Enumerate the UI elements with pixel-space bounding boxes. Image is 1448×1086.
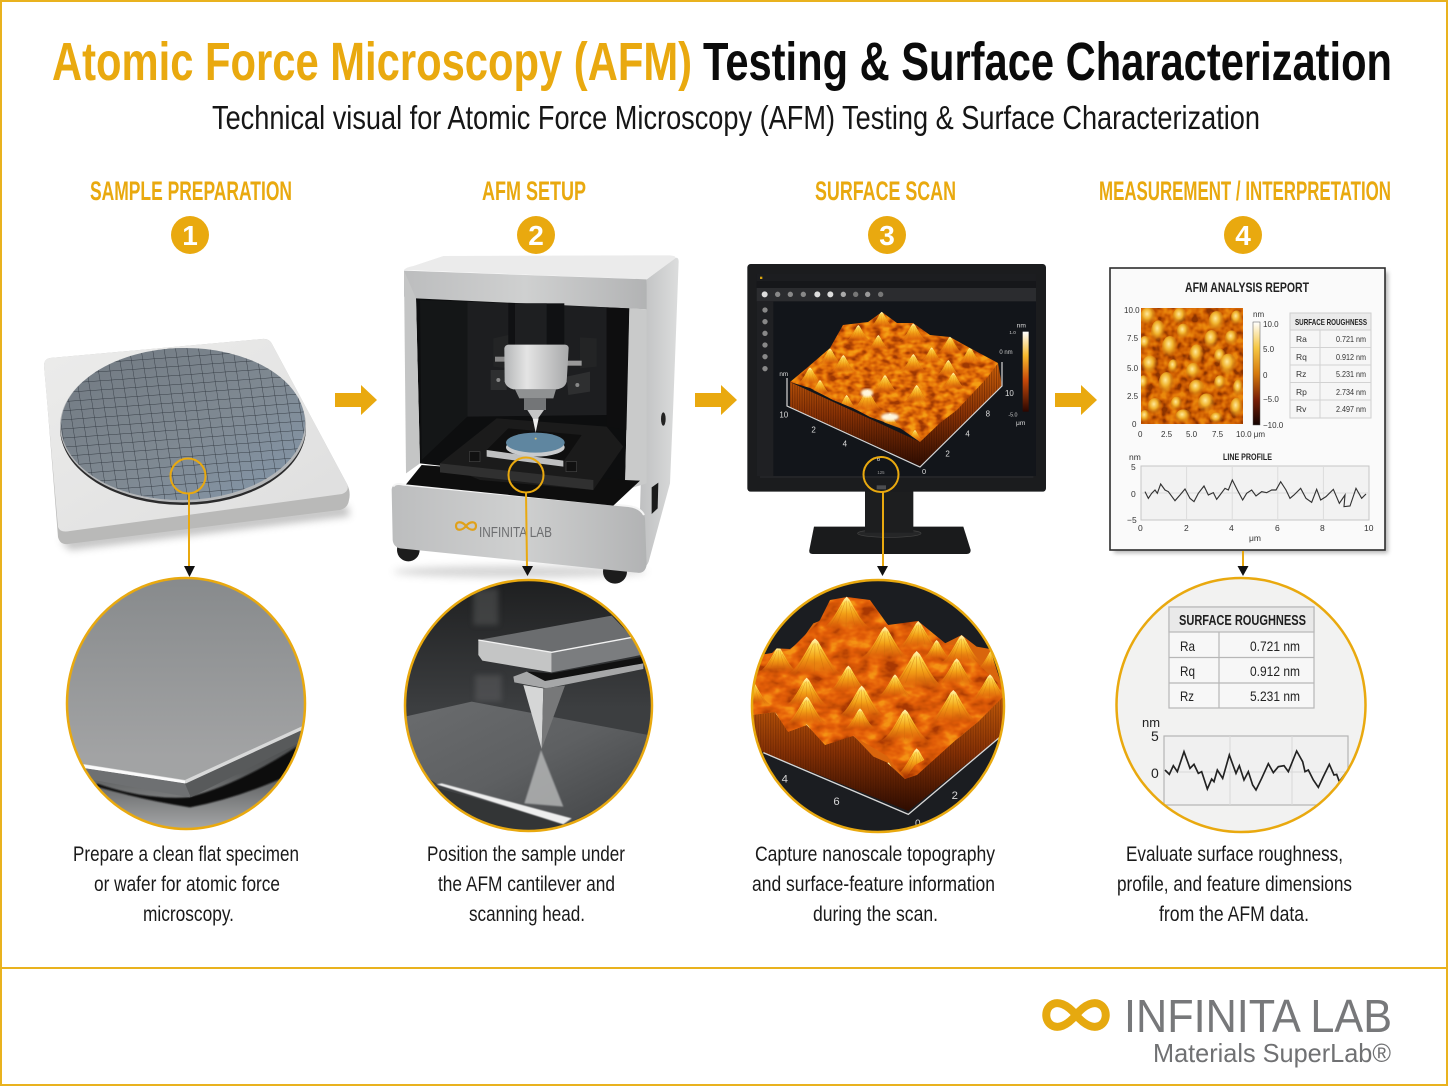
line profile chart: 6: [1275, 523, 1280, 533]
caption step 2: Position the sample under: [427, 842, 625, 866]
roughness mini table: Rq: [1180, 663, 1195, 679]
AFM height map: 2.5: [1161, 430, 1173, 439]
3D axes: [787, 362, 1002, 467]
AFM height map: 7.5: [1127, 334, 1139, 343]
callout: monitor magnifier: [864, 457, 898, 576]
monitor with AFM software: 0: [922, 467, 926, 476]
AFM height map: 0: [1138, 430, 1143, 439]
instrument logo: [456, 522, 552, 541]
3D surface walls: [790, 363, 1002, 466]
instrument logo: INFINITA LAB: [479, 524, 552, 541]
callout: instrument magnifier: [508, 458, 544, 576]
AFM height map: 0: [1132, 420, 1137, 429]
AFM instrument illustration: [392, 255, 679, 584]
detail circle: cantilever and tip: [404, 578, 654, 832]
number badge 4: [1224, 216, 1262, 254]
roughness table: Rz: [1296, 369, 1306, 379]
footer logo: Materials SuperLab®: [1153, 1038, 1391, 1068]
cantilever beam: [478, 616, 632, 652]
caption step 1: [73, 842, 299, 926]
heading: step 2 AFM setup: AFM SETUP: [482, 176, 586, 206]
caption step 1: or wafer for atomic force: [94, 872, 280, 896]
line profile chart: −5: [1127, 515, 1137, 525]
roughness table: Rp: [1296, 387, 1307, 397]
arrow: step 1 to 2: [335, 385, 377, 415]
roughness table: SURFACE ROUGHNESS: [1295, 317, 1367, 327]
detail circle: 3D surface topography: [750, 578, 1006, 834]
tip reflection: [524, 750, 563, 807]
machine front top band: [404, 271, 647, 309]
line profile chart: [1127, 452, 1374, 543]
footer divider: [0, 967, 1448, 969]
monitor with AFM software: 6: [877, 456, 881, 463]
roughness table: 5.231 nm: [1336, 369, 1366, 379]
detail circle: 3D surface topography: 0: [915, 819, 921, 830]
line profile chart: 8: [1320, 523, 1325, 533]
number badge 1: 1: [182, 220, 198, 251]
line profile chart: 5: [1131, 462, 1136, 472]
wafer on plate illustration: [44, 339, 350, 550]
callout: report connector: [1238, 551, 1248, 576]
caption step 1: Prepare a clean flat specimen: [73, 842, 299, 866]
number badge 4: 4: [1235, 220, 1251, 251]
footer logo: [1046, 990, 1392, 1068]
colour scale: 0: [1263, 371, 1268, 380]
roughness table: 2.497 nm: [1336, 404, 1366, 414]
deck: [406, 465, 640, 506]
roughness mini table: Ra: [1180, 638, 1195, 654]
caption step 4: Evaluate surface roughness,: [1126, 842, 1343, 866]
roughness mini table: 5.231 nm: [1250, 688, 1300, 704]
pillars: [404, 271, 420, 473]
AFM height map: 10.0 μm: [1236, 430, 1265, 439]
detail circle: 3D surface topography: 6: [833, 796, 840, 808]
monitor with AFM software: 10: [779, 410, 789, 419]
AFM height map: 5.0: [1127, 364, 1139, 373]
caption step 4: [1117, 842, 1352, 926]
title: [52, 32, 1392, 92]
3D surface peaks: [794, 312, 984, 442]
roughness table: 0.721 nm: [1336, 334, 1366, 344]
colour scale: 10.0: [1263, 320, 1279, 329]
monitor with AFM software: 8: [986, 410, 991, 419]
AFM height map: 7.5: [1212, 430, 1224, 439]
number badge 2: 2: [528, 220, 544, 251]
monitor with AFM software: -5.0: [1008, 413, 1018, 419]
title: Atomic Force Microscopy (AFM): [52, 32, 692, 92]
machine top: [404, 255, 676, 279]
colour scale: −10.0: [1263, 421, 1284, 430]
roughness table: 0.912 nm: [1336, 352, 1366, 362]
caption step 4: profile, and feature dimensions: [1117, 872, 1352, 896]
footer logo: INFINITA LAB: [1124, 990, 1392, 1042]
number badge 1: [171, 216, 209, 254]
monitor with AFM software: 4: [843, 440, 848, 449]
monitor with AFM software: 0 nm: [999, 350, 1013, 356]
roughness table: Ra: [1296, 334, 1307, 344]
monitor with AFM software: 4: [965, 430, 970, 439]
monitor with AFM software: nm: [1017, 323, 1026, 330]
mini profile plot: 5: [1151, 728, 1159, 744]
callout: sample magnifier: [170, 458, 206, 577]
chamber: [416, 298, 629, 487]
roughness mini table: Rz: [1180, 688, 1194, 704]
roughness mini table: 0.912 nm: [1250, 663, 1300, 679]
roughness table: Rv: [1296, 404, 1307, 414]
number badge 3: [868, 216, 906, 254]
line profile chart: 4: [1229, 523, 1234, 533]
stage surface: [405, 702, 648, 823]
AFM height map: 5.0: [1186, 430, 1198, 439]
roughness mini table: SURFACE ROUGHNESS: [1179, 613, 1306, 629]
monitor with AFM software: μm: [1016, 420, 1026, 427]
caption step 4: from the AFM data.: [1159, 902, 1309, 926]
number badge 2: [517, 216, 555, 254]
colour scale: 5.0: [1263, 345, 1275, 354]
monitor with AFM software: [747, 264, 1046, 554]
surface map: [753, 597, 1007, 779]
mini profile plot: 0: [1151, 765, 1159, 781]
caption step 2: the AFM cantilever and: [438, 872, 615, 896]
detail circle: specimen surface: [60, 570, 315, 837]
roughness mini table: [1169, 607, 1314, 708]
line profile chart: 0: [1131, 489, 1136, 499]
subtitle: Technical visual for Atomic Force Microscopy (AFM) Testing & Surface Characterization: [212, 99, 1260, 136]
base: [392, 484, 647, 573]
arrow: step 3 to 4: [1055, 385, 1097, 415]
machine right side: [640, 258, 679, 565]
detail circle: 3D surface topography: 4: [782, 773, 788, 785]
line profile chart: 10: [1364, 523, 1374, 533]
roughness table: 2.734 nm: [1336, 387, 1366, 397]
colour scale: [1253, 310, 1284, 430]
monitor with AFM software: nm: [779, 371, 788, 378]
caption step 3: during the scan.: [813, 902, 938, 926]
report sheet: AFM analysis report: [1110, 268, 1388, 553]
roughness table: [1290, 313, 1371, 418]
AFM height map: [1124, 306, 1265, 439]
icon: infinity mark: [1046, 1003, 1106, 1027]
roughness mini table: 0.721 nm: [1250, 638, 1300, 654]
detail circle: 3D surface topography: 2: [952, 790, 958, 802]
monitor with AFM software: 2: [811, 426, 816, 435]
caption step 3: Capture nanoscale topography: [755, 842, 995, 866]
detail circle: roughness values: [1110, 575, 1372, 840]
caption step 3: and surface-feature information: [752, 872, 995, 896]
caption step 1: microscopy.: [143, 902, 234, 926]
mini profile plot: [1142, 715, 1348, 805]
line profile chart: μm: [1249, 533, 1261, 543]
heading: step 1 sample preparation: SAMPLE PREPARATION: [90, 176, 292, 206]
line profile chart: LINE PROFILE: [1223, 452, 1272, 463]
AFM height map: 2.5: [1127, 392, 1139, 401]
number badge 3: 3: [879, 220, 895, 251]
caption step 2: scanning head.: [469, 902, 585, 926]
mini profile plot: nm: [1142, 715, 1160, 730]
AFM height map: 10.0: [1124, 306, 1140, 315]
line profile chart: nm: [1129, 452, 1141, 462]
report title: AFM ANALYSIS REPORT: [1185, 280, 1310, 295]
line profile chart: 2: [1184, 523, 1189, 533]
caption step 2: [427, 842, 625, 926]
monitor with AFM software: 1.0: [1009, 330, 1016, 335]
probe tip: [523, 685, 543, 749]
roughness table: Rq: [1296, 352, 1307, 362]
scan head: [493, 335, 508, 368]
monitor with AFM software: 125: [877, 470, 885, 475]
colour scale: nm: [1253, 310, 1264, 319]
heading: step 3 surface scan: SURFACE SCAN: [815, 176, 956, 206]
line profile chart: 0: [1138, 523, 1143, 533]
colour scale: −5.0: [1263, 395, 1279, 404]
caption step 3: [752, 842, 995, 926]
monitor with AFM software: 2: [945, 450, 950, 459]
monitor with AFM software: 10: [1005, 389, 1014, 398]
arrow: step 2 to 3: [695, 385, 737, 415]
3D surface map: [790, 312, 998, 442]
sample disc: [506, 438, 565, 457]
